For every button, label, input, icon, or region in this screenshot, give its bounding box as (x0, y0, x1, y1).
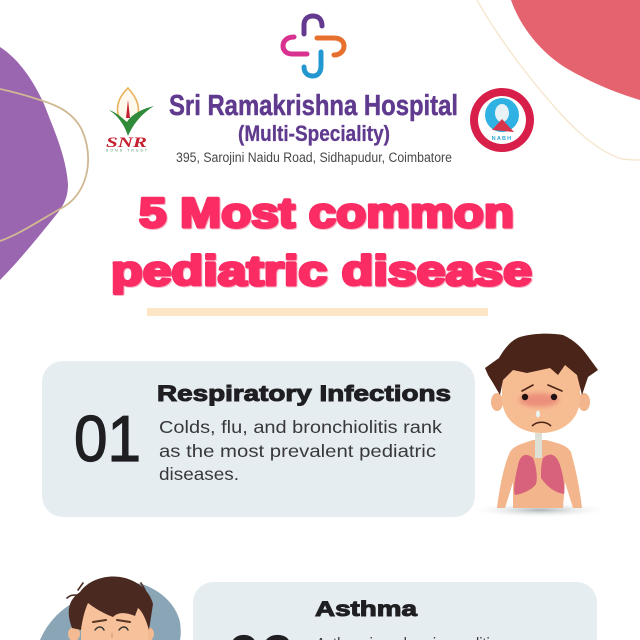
number 02 (233, 634, 489, 640)
address: 395, Sarojini Naidu Road, Sidhapudur, Coimbatore (176, 150, 452, 165)
number 01: 01 (74, 402, 141, 475)
title: pediatric disease (111, 247, 532, 294)
decorative purple blob (0, 47, 68, 280)
SNR trust logo: SNR (106, 135, 147, 151)
illustration: boy with asthma (40, 577, 181, 640)
SNR trust logo: SONS TRUST (106, 148, 147, 152)
body text: diseases. (159, 464, 239, 484)
hospital cross logo (283, 16, 344, 76)
speciality line: (Multi-Speciality) (238, 121, 390, 146)
title underline (147, 308, 488, 316)
NABH badge (470, 88, 534, 152)
heading: Asthma (315, 598, 417, 621)
body text: as the most prevalent pediatric (159, 441, 436, 461)
decorative tan curve left (0, 89, 88, 241)
body text (159, 417, 442, 484)
decorative coral blob (511, 0, 640, 100)
body text: Colds, flu, and bronchiolitis rank (159, 417, 442, 437)
panel: respiratory infections (42, 361, 475, 517)
hospital name: Sri Ramakrishna Hospital (169, 90, 458, 122)
panel: asthma (193, 582, 597, 640)
SNR trust logo (106, 88, 154, 152)
NABH badge: NABH (492, 136, 512, 142)
decorative tan curve right (477, 0, 640, 160)
title (111, 189, 532, 294)
title: 5 Most common (139, 189, 514, 236)
illustration: sick boy with lungs (468, 334, 612, 518)
heading: Respiratory Infections (157, 381, 451, 406)
